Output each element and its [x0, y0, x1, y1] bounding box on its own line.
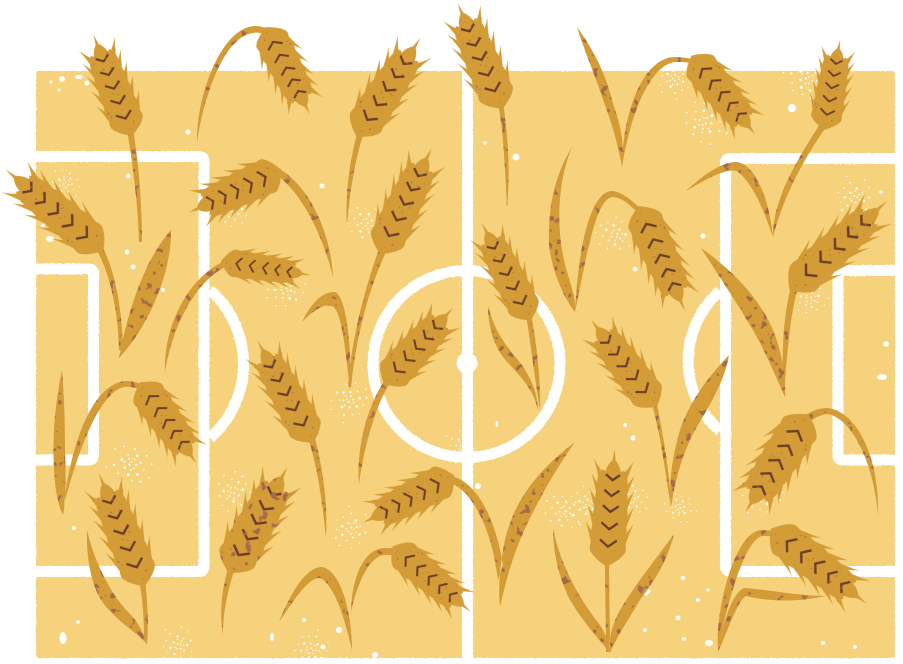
ear: [358, 138, 453, 265]
ear: [245, 17, 330, 124]
plant 24: [718, 510, 881, 652]
ear: [352, 455, 465, 543]
right penalty arc: [688, 291, 720, 431]
left penalty box: [36, 156, 204, 572]
ear: [573, 306, 675, 421]
plant 8: [237, 329, 333, 538]
stem and leaf: [279, 548, 400, 650]
plant 12: [53, 369, 215, 515]
stem: [308, 434, 326, 538]
plant 14: [352, 442, 575, 607]
plant 5: [165, 243, 314, 373]
ear: [179, 148, 291, 234]
plant 22: [553, 448, 674, 653]
left penalty arc: [210, 290, 243, 438]
stem: [165, 258, 234, 373]
ear: [804, 37, 860, 134]
ear: [72, 27, 154, 144]
ear: [674, 41, 773, 149]
ear: [756, 510, 881, 623]
plant 6: [336, 25, 441, 226]
plant 23: [723, 400, 878, 527]
stem and leaf: [87, 530, 148, 645]
stem and leaf: [488, 305, 540, 411]
ear: [723, 400, 831, 527]
plant 1: [72, 27, 154, 242]
plant 21: [573, 306, 729, 508]
plant 18: [686, 37, 860, 237]
ear: [773, 183, 903, 308]
ear: [582, 448, 639, 568]
plant 15: [436, 0, 525, 207]
ear: [121, 369, 215, 476]
plant 2: [197, 17, 330, 142]
stem: [127, 129, 142, 242]
ear: [462, 213, 550, 330]
plant 11: [206, 454, 310, 635]
ear: [0, 151, 119, 269]
stem: [803, 408, 878, 516]
ear: [77, 464, 167, 595]
plant 7: [302, 138, 453, 388]
ear: [379, 530, 484, 628]
centre circle: [373, 270, 560, 458]
ear: [336, 25, 441, 150]
ear: [616, 196, 707, 320]
plant 3: [0, 151, 171, 358]
stem and leaf: [718, 530, 825, 652]
ear: [206, 454, 310, 586]
stem and leaf: [549, 147, 642, 312]
halfway line: [462, 70, 473, 659]
right penalty box: [726, 158, 896, 572]
stem and leaf: [686, 124, 826, 237]
stem: [359, 378, 391, 485]
stem and leaf: [577, 27, 697, 167]
ear: [367, 293, 470, 400]
stem and leaf: [302, 246, 387, 388]
stem: [221, 565, 235, 635]
plant 10: [77, 464, 167, 645]
plant 9: [359, 293, 470, 485]
plant 19: [701, 183, 903, 397]
stem: [498, 102, 509, 207]
stem and leaf: [53, 370, 146, 515]
ear: [218, 243, 314, 293]
ear: [237, 329, 333, 454]
stem: [273, 168, 333, 277]
plant 4: [179, 148, 333, 277]
stem: [347, 130, 364, 226]
plant 13: [279, 530, 484, 650]
ear: [436, 0, 525, 118]
plant 16: [577, 27, 773, 167]
plant 17: [549, 147, 707, 320]
stem and leaf: [94, 230, 171, 358]
stem and leaves: [553, 528, 674, 653]
centre spot: [456, 352, 478, 374]
stem: [197, 26, 272, 142]
plant 20: [462, 213, 550, 411]
left goal box: [36, 269, 94, 460]
stem and leaf: [447, 442, 575, 607]
stem and leaf: [701, 248, 798, 397]
stem and leaf: [651, 355, 729, 508]
right goal box: [838, 270, 896, 460]
